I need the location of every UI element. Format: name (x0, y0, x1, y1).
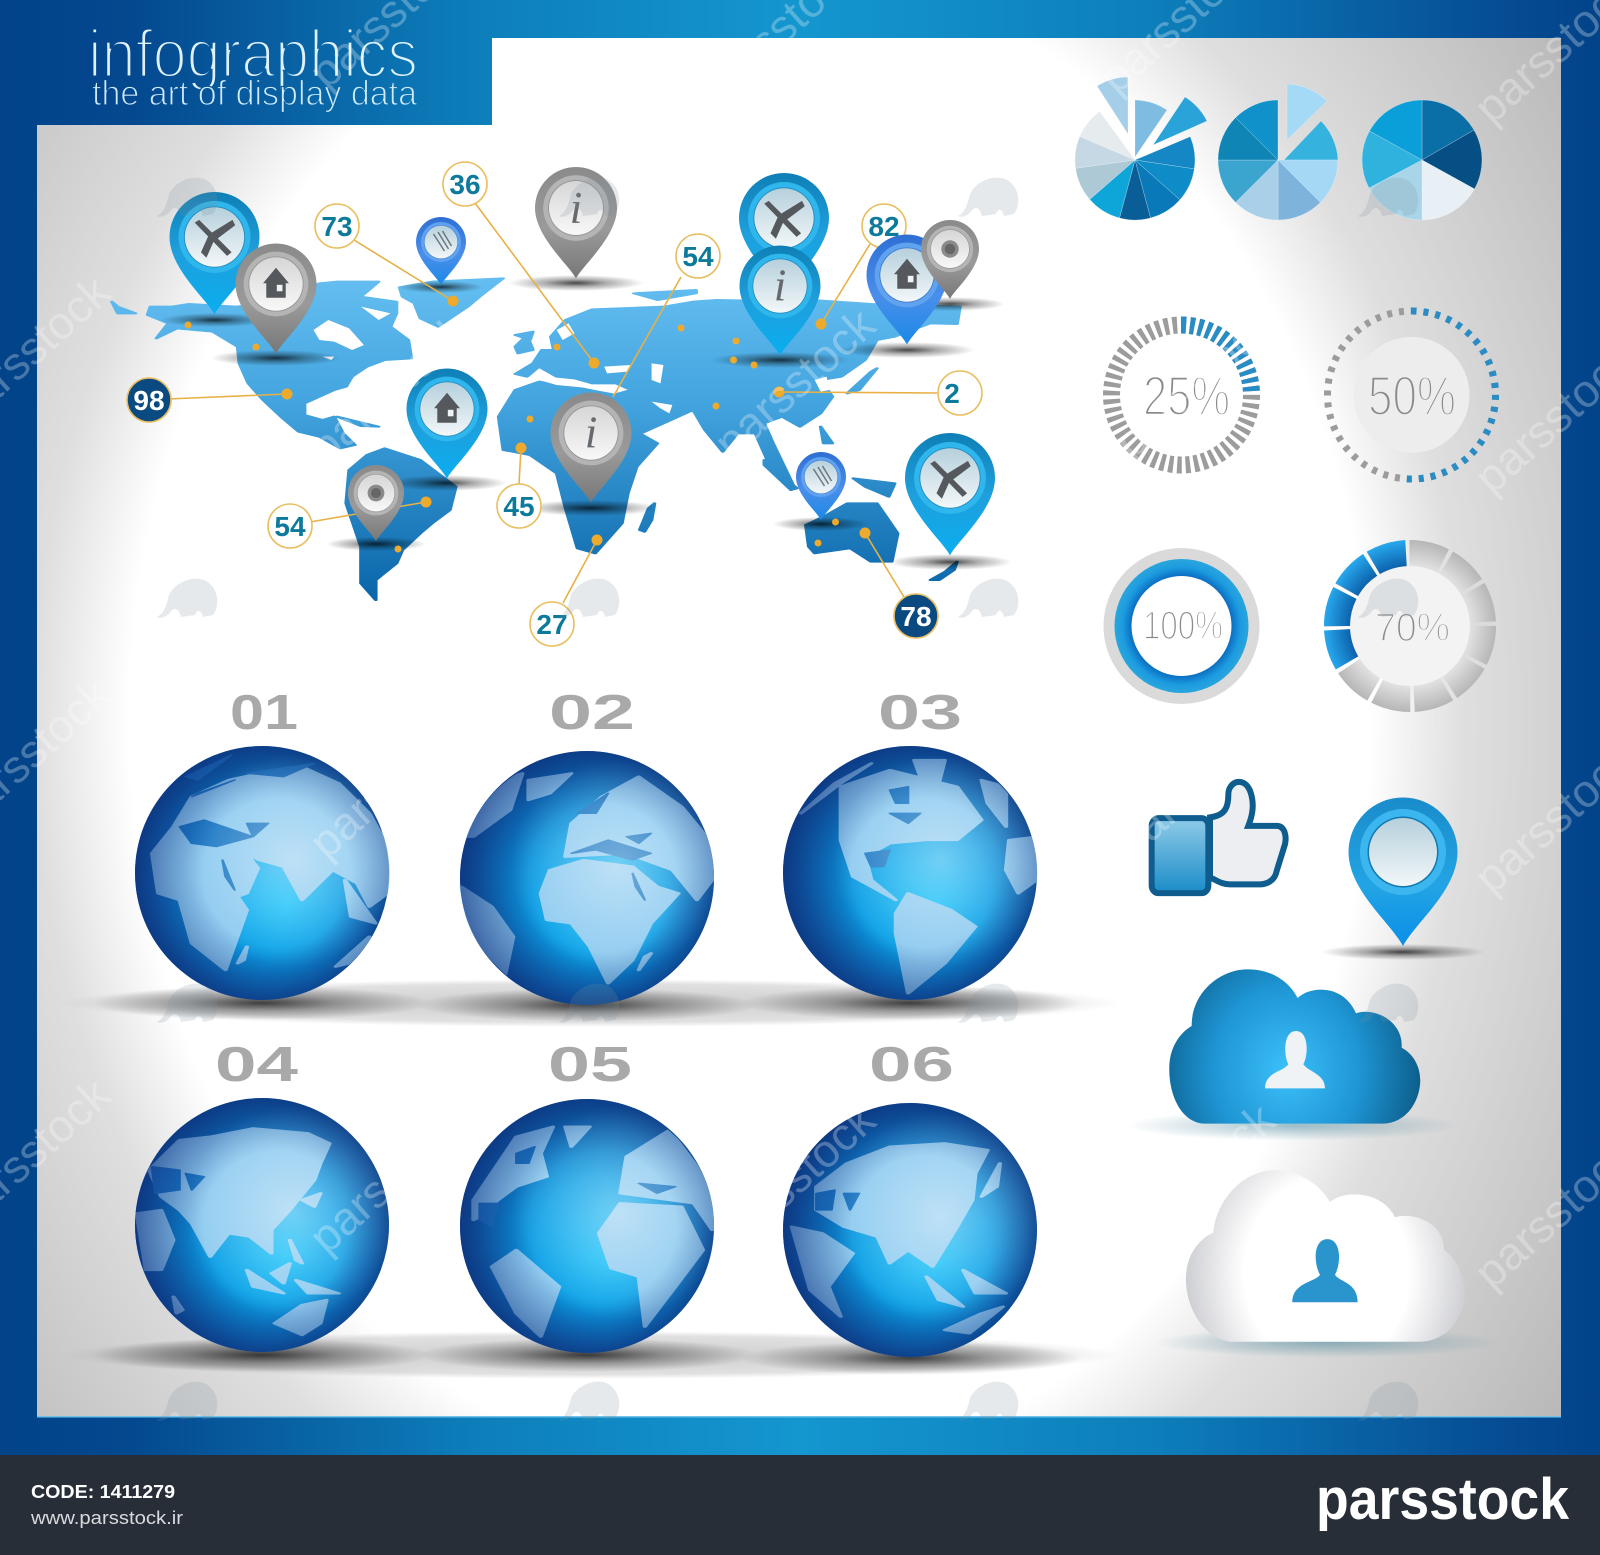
watermark text: parsstock (299, 697, 481, 868)
watermark text: parsstock (299, 1092, 481, 1263)
footer logo: parsstock (1316, 1467, 1570, 1532)
panel bottom highlight (37, 1416, 1561, 1418)
label: 45: 45 (503, 491, 535, 522)
label: 73: 73 (321, 211, 353, 242)
watermark text: parsstock (299, 302, 481, 473)
globe 05 (460, 1099, 714, 1353)
watermark text: parsstock (1104, 297, 1286, 468)
globe shadows row 2 (60, 1331, 1120, 1379)
pie chart 1 (1075, 77, 1207, 220)
watermark text: parsstock (1104, 697, 1286, 868)
icon: blue user cloud (1127, 969, 1460, 1141)
label: 98 (127, 378, 292, 422)
title block (88, 16, 418, 113)
label: 78 (860, 528, 938, 638)
gauge: 50 percent (1328, 311, 1496, 479)
pin: plane north america (170, 192, 260, 314)
pin: small lines (416, 217, 466, 285)
label: 27: 27 (536, 609, 568, 640)
icon: thumbs up (1152, 782, 1286, 893)
world map (112, 278, 960, 600)
gauge: 70 percent (1310, 526, 1510, 726)
label: 36 (443, 162, 600, 368)
gauge: 100 percent (1104, 548, 1260, 704)
pin: home royal blue (866, 234, 948, 345)
pin: info grey africa (550, 392, 632, 503)
globe 04 (135, 1098, 389, 1352)
number 03: 03 (878, 686, 962, 740)
globe 03 (783, 746, 1037, 1000)
label: 54 north (613, 234, 720, 397)
label: 73 (315, 204, 458, 306)
watermark text: parsstock (704, 297, 886, 468)
number 01: 01 (230, 686, 298, 740)
gauge: 25 percent: 25% (1143, 364, 1230, 427)
icon: white user cloud (1153, 1170, 1500, 1358)
label: 82 (816, 204, 906, 330)
pin: info blue (740, 246, 820, 356)
label: 36: 36 (449, 169, 481, 200)
pin: plane asia (739, 173, 829, 295)
pin: home grey (236, 244, 316, 354)
pin: info grey north: i (570, 182, 582, 233)
icon: large map pin (1321, 798, 1485, 960)
label: 78: 78 (900, 601, 932, 632)
gauge: 70 percent: 70% (1375, 606, 1450, 650)
label: 2 (774, 371, 982, 415)
number 05: 05 (548, 1038, 632, 1092)
number 06: 06 (869, 1038, 954, 1092)
gauge: 100 percent: 100% (1143, 604, 1223, 648)
label: 45 (497, 442, 541, 528)
label: 54 south: 54 (274, 511, 306, 542)
watermark text: parsstock (704, 1092, 886, 1263)
pie chart 3 (1362, 100, 1482, 220)
globe 02 (460, 751, 714, 1005)
watermark text: parsstock (1104, 1092, 1286, 1263)
globe shadows row 1 (60, 979, 1120, 1027)
pin: home atlantic (406, 368, 488, 479)
pin: info blue: i (774, 261, 786, 311)
footer bar (0, 1455, 1600, 1555)
label: 54 south (268, 496, 432, 548)
title: infographics (88, 16, 418, 92)
pin: target grey south america (348, 465, 404, 541)
label: 27 (530, 534, 602, 646)
small map dots (184, 322, 839, 552)
number 04: 04 (215, 1038, 298, 1092)
pin: info grey africa: i (585, 408, 597, 458)
watermark text: parsstock (704, 697, 886, 868)
footer url: www.parsstock.ir (30, 1508, 183, 1528)
watermark logos (157, 178, 1418, 1421)
label: 54 north: 54 (682, 241, 714, 272)
pin: small lines indonesia (796, 452, 846, 520)
subtitle: the art of display data (92, 74, 418, 113)
globe 01 (135, 746, 389, 1000)
footer code: CODE: 1411279 (31, 1482, 175, 1502)
gauge: 50 percent: 50% (1368, 364, 1456, 427)
label: 82: 82 (868, 211, 900, 242)
label: 2: 2 (944, 378, 960, 409)
number 02: 02 (549, 686, 635, 740)
pin: info grey north (535, 167, 617, 279)
pin shadows (160, 275, 1012, 570)
gauge: 25 percent (1112, 325, 1252, 465)
globe 06 (783, 1103, 1037, 1357)
pin: target grey east (921, 220, 979, 299)
label: 98: 98 (133, 385, 165, 416)
pie chart 2 (1218, 84, 1338, 220)
pin: plane pacific (905, 433, 995, 555)
